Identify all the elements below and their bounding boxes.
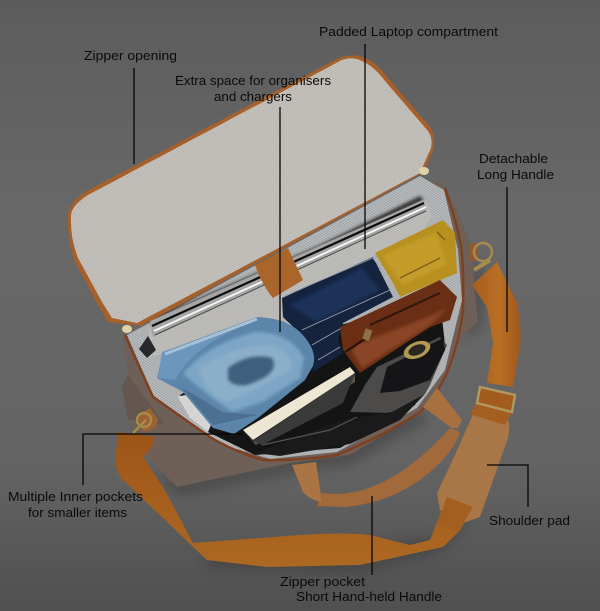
short handle (318, 428, 460, 507)
zipper trim around opening (125, 188, 463, 460)
laptop dark edge (152, 203, 424, 326)
lid outer leather trim (68, 55, 434, 326)
callout line: extra space (279, 107, 281, 332)
white roll (178, 395, 211, 432)
shoulder pad (437, 405, 509, 523)
notebook cover (253, 373, 355, 445)
laptop bright edge (154, 207, 426, 331)
callout line: long handle (506, 187, 508, 332)
strap buckle (477, 387, 515, 412)
right hook (474, 243, 492, 270)
handle right tab (423, 388, 462, 428)
label: extra space (175, 73, 332, 104)
lid corner zipper tab left (122, 325, 132, 333)
callout line: inner pockets (83, 434, 243, 485)
strap right section (472, 262, 521, 387)
label: detachable long handle: Long Handle (477, 167, 554, 182)
right hook tab (470, 243, 478, 261)
left hook tab (137, 408, 158, 432)
label: multiple inner pockets: Multiple Inner pockets (8, 489, 144, 504)
label: padded laptop compartment: Padded Laptop compartment (319, 24, 498, 39)
yellow fabric (375, 220, 457, 297)
label: zipper pocket and short handle (280, 574, 442, 604)
black zip pockets (255, 394, 425, 456)
left hook (133, 413, 151, 433)
left corner dark shadow (139, 336, 156, 358)
label: extra space: Extra space for organisers (175, 73, 332, 88)
strap keeper under buckle (477, 388, 514, 412)
callout line: zipper opening (133, 68, 135, 164)
laptop body (150, 200, 427, 337)
navy striped fabric (282, 257, 393, 372)
bag body canvas (122, 180, 478, 487)
group: laptop (150, 196, 427, 337)
deep interior shadow (180, 300, 445, 455)
callout line: shoulder pad (487, 465, 528, 507)
pad strap ends (438, 402, 512, 532)
laptop strap (255, 248, 303, 298)
callout line: laptop compartment (364, 44, 366, 249)
label: detachable long handle (477, 151, 554, 182)
lid corner zipper tab right (419, 167, 429, 175)
laptop sleeve pocket (146, 198, 432, 358)
callout line: short handle (371, 496, 373, 575)
bag body left fold (122, 375, 165, 425)
grey inner pocket (350, 337, 447, 413)
zipper line (262, 417, 357, 445)
label: zipper pocket and short handle: Zipper pocket (280, 574, 365, 589)
notebook (243, 367, 355, 445)
pouch zipper pull (362, 328, 372, 341)
label: zipper pocket and short handle: Short Hand-held Handle (296, 589, 442, 604)
interior lining (127, 176, 462, 459)
cap badge (401, 337, 433, 363)
handle left tab (292, 462, 322, 502)
shoulder strap (115, 432, 473, 567)
label: extra space: and chargers (214, 89, 293, 104)
bag drop shadow (150, 250, 486, 572)
label: multiple inner pockets (8, 489, 144, 520)
laptop shadow (150, 196, 424, 330)
label: multiple inner pockets: for smaller items (28, 505, 128, 520)
label: detachable long handle: Detachable (479, 151, 548, 166)
cap (380, 337, 445, 393)
lid striped lining (71, 58, 432, 323)
label: shoulder pad: Shoulder pad (489, 513, 570, 528)
label: zipper opening: Zipper opening (84, 48, 177, 63)
leather pouch (340, 280, 457, 373)
denim roll (157, 317, 314, 434)
